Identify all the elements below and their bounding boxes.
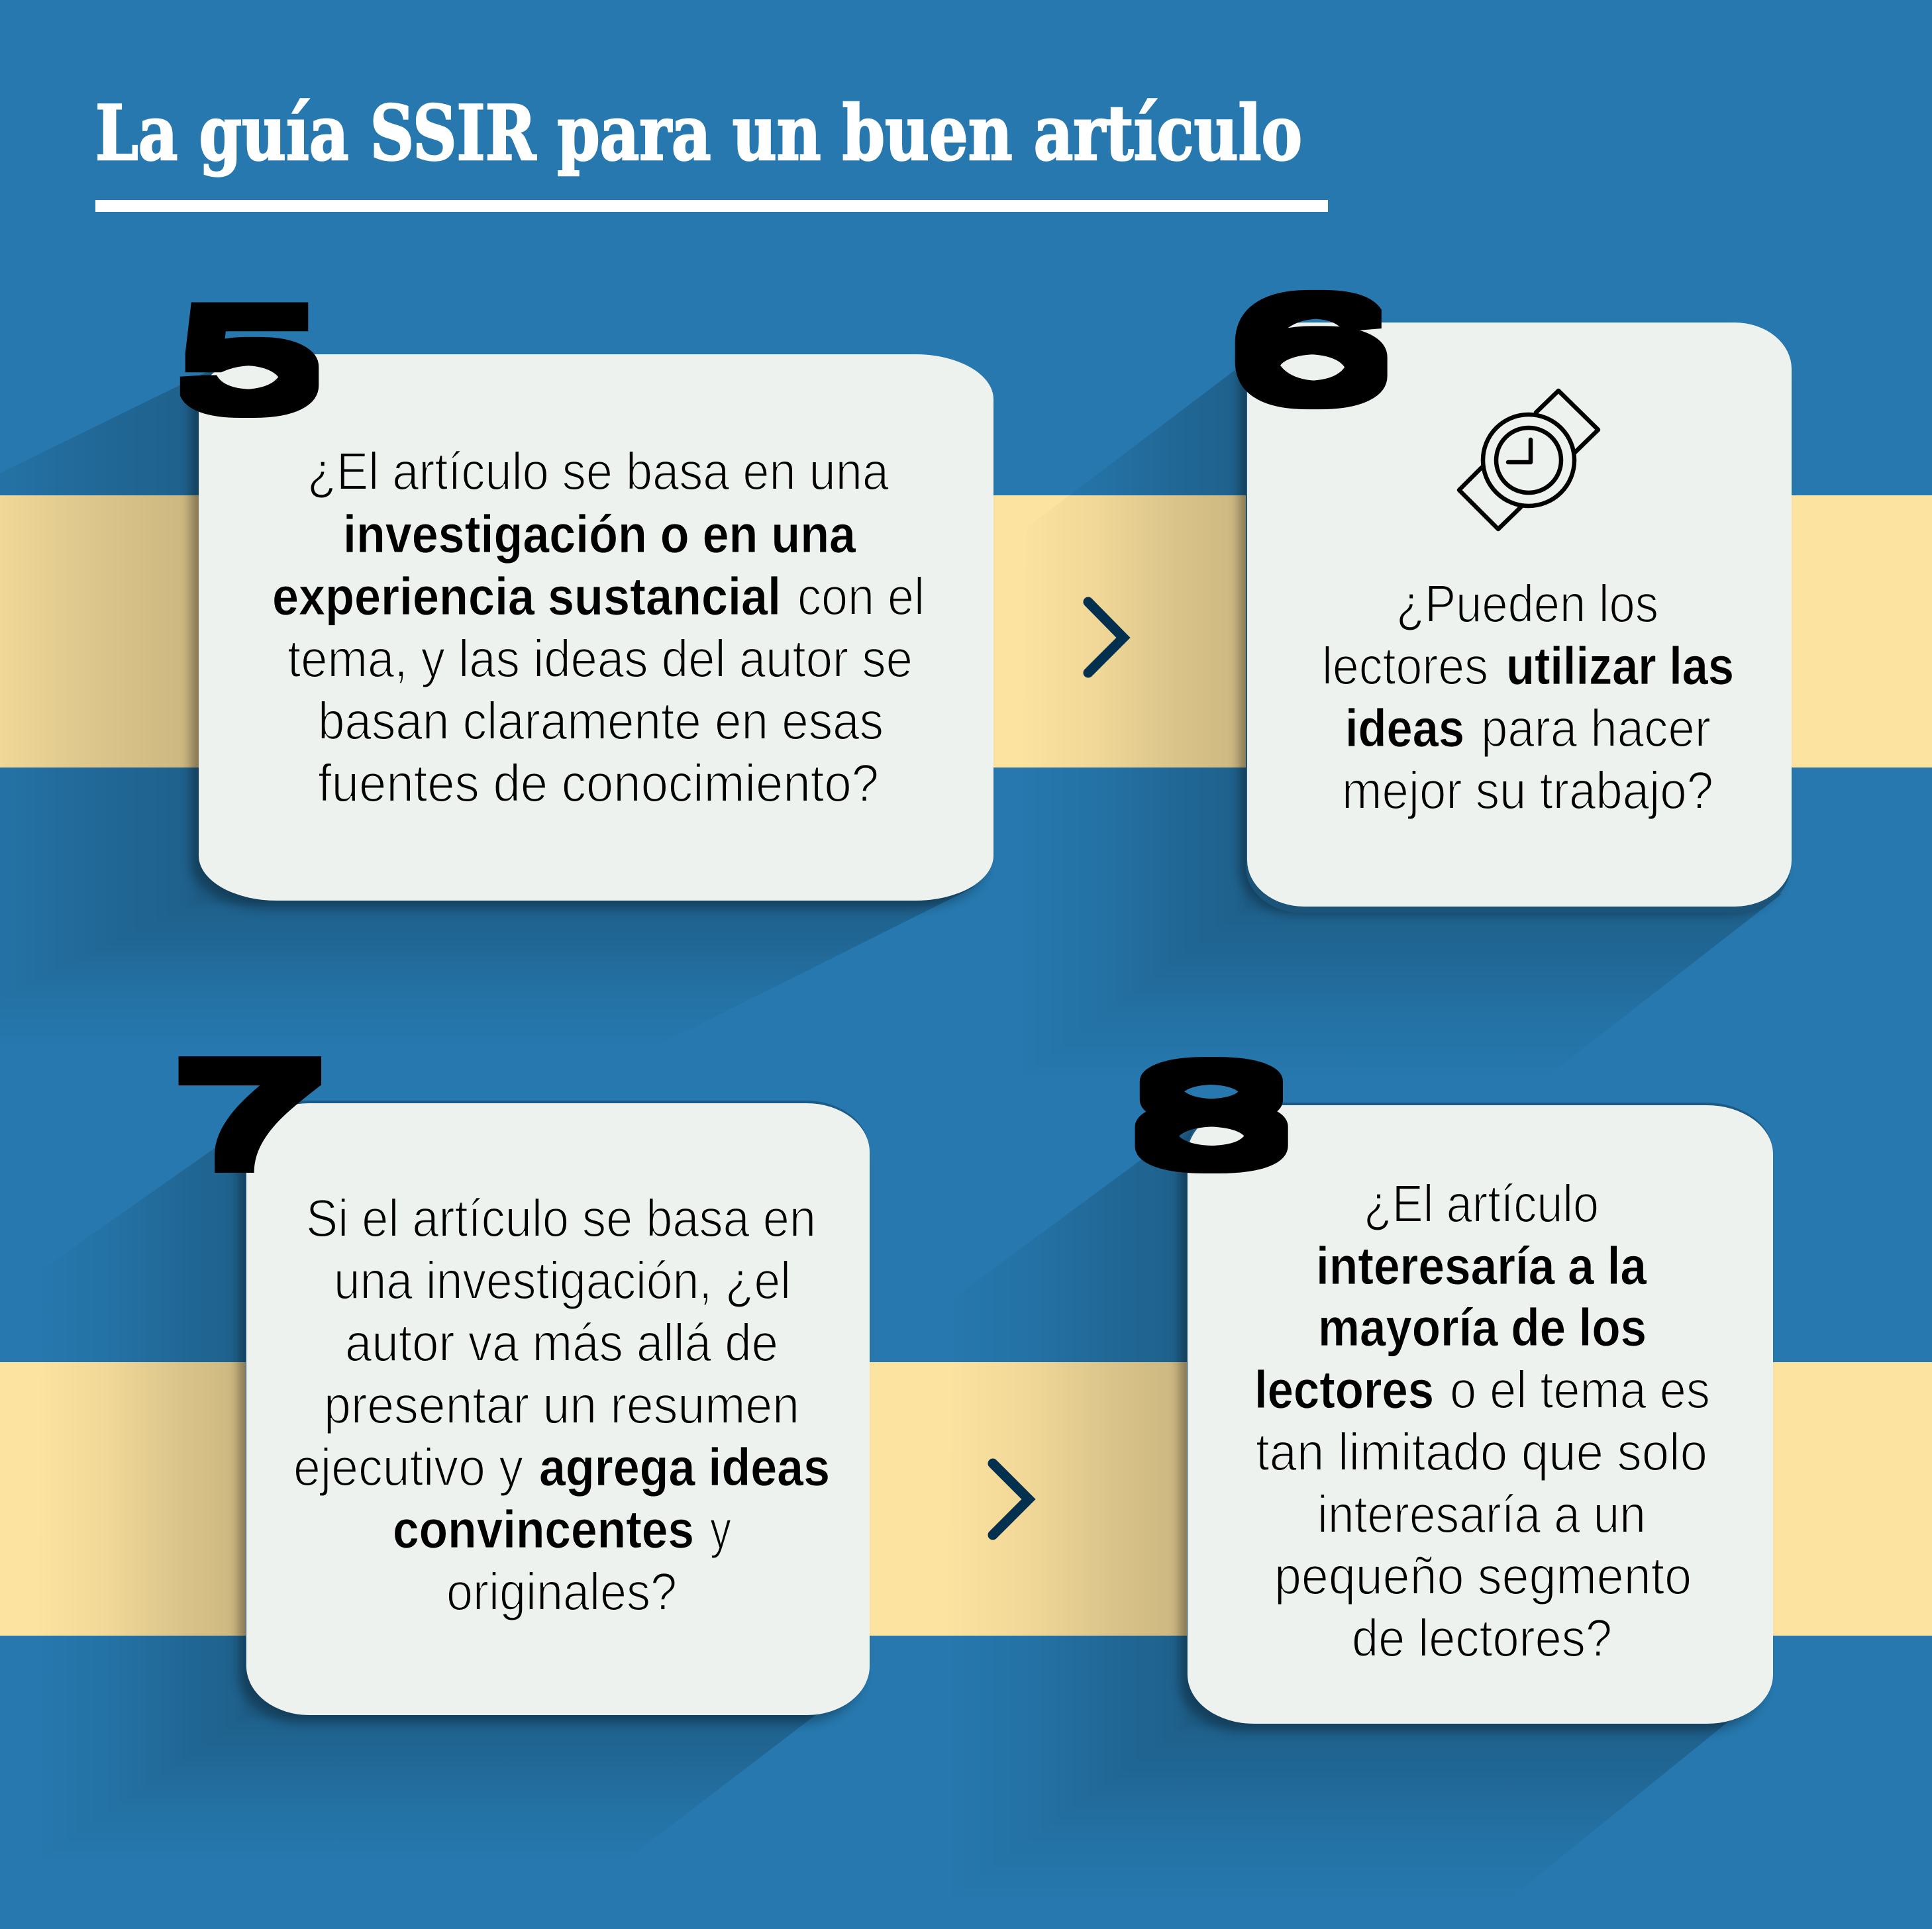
text: question 6: ideas — [1345, 699, 1464, 758]
text: question 6: ¿Pueden los — [1396, 574, 1658, 633]
long shadow: card 7 — [34, 1120, 835, 1864]
text: question 6: mejor su trabajo? — [1342, 761, 1713, 820]
text: question 8: ¿El artículo — [1364, 1174, 1599, 1233]
title underline — [95, 200, 1328, 212]
arrow: card 5 to card 6 — [1088, 602, 1123, 673]
number 7: 7 — [171, 1035, 329, 1194]
text: question 5: experiencia sustancial — [272, 567, 781, 626]
text: question 5: investigación o en una — [343, 505, 856, 564]
text: question 5: con el — [797, 567, 925, 626]
text: question 6 — [1322, 574, 1734, 820]
text: question 7: convincentes — [393, 1500, 694, 1559]
text: question 6: para hacer — [1481, 699, 1711, 758]
band: top yellow stripe — [0, 495, 1932, 767]
panel: card 5 — [191, 354, 993, 909]
text: question 5: fuentes de conocimiento? — [318, 754, 879, 813]
text: question 8: lectores — [1254, 1360, 1434, 1419]
text: question 5: ¿El artículo se basa en una — [307, 442, 889, 501]
text: question 7: agrega ideas — [539, 1438, 830, 1497]
text: question 8: tan limitado que solo — [1256, 1422, 1707, 1481]
text: question 5: tema, y las ideas del autor se — [287, 629, 913, 688]
text: question 7: una investigación, ¿el — [334, 1251, 791, 1310]
text: question 8: o el tema es — [1450, 1360, 1710, 1419]
number 8: 8 — [1129, 1038, 1294, 1193]
text: question 5: basan claramente en esas — [318, 691, 884, 750]
band: bottom yellow stripe — [0, 1362, 1932, 1636]
text: question 7: originales? — [446, 1562, 677, 1621]
panel: card 7 — [238, 1101, 870, 1723]
text: question 7: y — [710, 1500, 731, 1559]
text: question 7: Si el artículo se basa en — [306, 1189, 816, 1248]
number 5: 5 — [176, 281, 323, 437]
long shadow: card 8 — [942, 1117, 1749, 1904]
text: question 8: pequeño segmento — [1274, 1546, 1692, 1605]
text: question 8: interesaría a un — [1317, 1485, 1646, 1544]
text: question 6: lectores — [1322, 636, 1488, 695]
text: question 8: mayoría de los — [1318, 1298, 1647, 1357]
long shadow: card 6 — [1015, 352, 1782, 1082]
text: question 7 — [293, 1189, 830, 1621]
text: question 7: autor va más allá de — [345, 1313, 778, 1372]
panel: card 8 — [1180, 1103, 1773, 1732]
text: question 6: utilizar las — [1506, 636, 1734, 695]
text: question 5 — [272, 442, 925, 813]
long shadow: card 5 — [0, 370, 974, 1050]
number 6: 6 — [1227, 270, 1394, 429]
text: question 7: ejecutivo y — [293, 1438, 523, 1497]
text: question 8: de lectores? — [1352, 1608, 1612, 1667]
icon: wristwatch — [1459, 391, 1598, 529]
text: question 7: presentar un resumen — [324, 1375, 799, 1434]
text: question 8 — [1254, 1174, 1710, 1667]
panel: card 6 — [1239, 322, 1792, 915]
title: La guía SSIR para un buen artículo — [95, 89, 1302, 177]
arrow: card 7 to card 8 — [993, 1463, 1029, 1535]
text: question 8: interesaría a la — [1316, 1236, 1647, 1295]
